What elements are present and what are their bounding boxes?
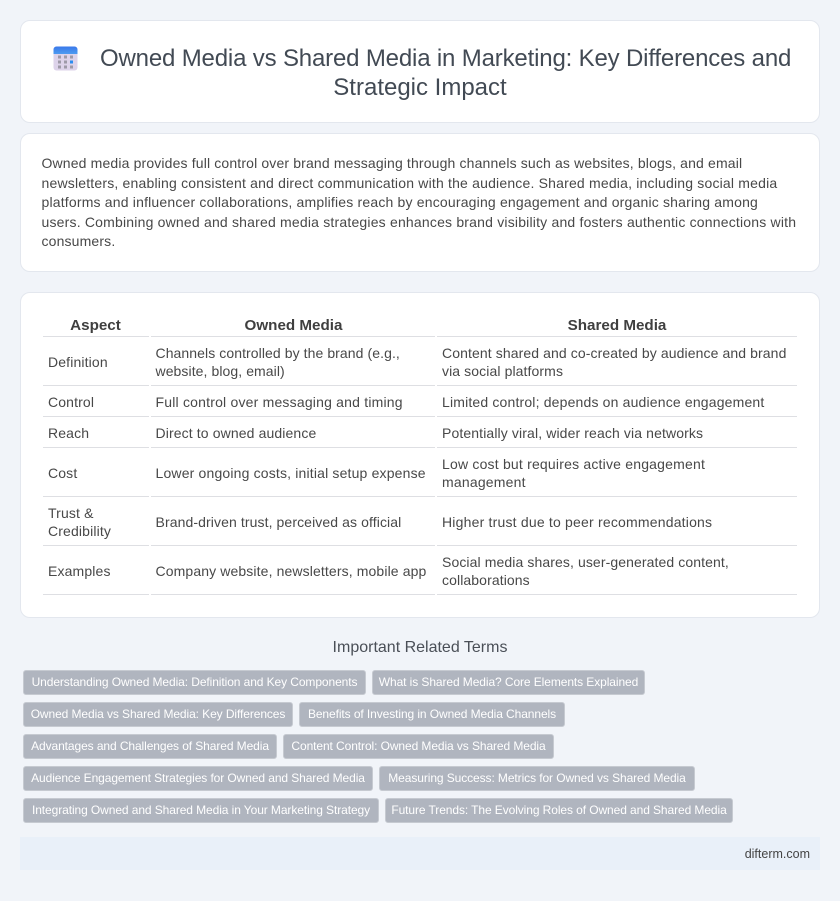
panel: intro text: newsletters, enabling consistent and direct communication with the audience. Shared media, including social media bbox=[42, 175, 777, 191]
row: trust bbox=[48, 505, 111, 539]
panel: comparison table: Company website, newsletters, mobile app bbox=[156, 563, 426, 579]
tags: related terms bbox=[23, 670, 733, 823]
tags: related terms: Owned Media vs Shared Media: Key Differences bbox=[31, 707, 285, 721]
panel: comparison table: Content shared and co-created by audience and brand bbox=[442, 345, 786, 361]
footer bbox=[20, 837, 820, 870]
tags: related terms: What is Shared Media? Core Elements Explained bbox=[379, 675, 638, 689]
panel: intro text bbox=[20, 133, 820, 272]
panel: comparison table: website, blog, email) bbox=[156, 363, 285, 379]
tags: related terms: Measuring Success: Metrics for Owned vs Shared Media bbox=[388, 771, 686, 785]
panel: comparison table bbox=[20, 292, 820, 618]
panel: comparison table: Potentially viral, wider reach via networks bbox=[442, 425, 703, 441]
panel: comparison table: Higher trust due to peer recommendations bbox=[442, 514, 712, 530]
icon: calendar bbox=[54, 46, 78, 70]
panel: comparison table: Direct to owned audience bbox=[156, 425, 316, 441]
row: trust: Credibility bbox=[48, 523, 111, 539]
panel: comparison table: Owned Media bbox=[245, 317, 342, 334]
row: definition: Definition bbox=[48, 354, 108, 370]
row: control: Control bbox=[48, 394, 94, 410]
tags: related terms: Benefits of Investing in Owned Media Channels bbox=[308, 707, 556, 721]
title: Owned Media vs Shared Media in Marketing: Key Differences and bbox=[100, 45, 791, 72]
tags: related terms: Understanding Owned Media: Definition and Key Components bbox=[32, 675, 357, 689]
footer source: difterm.com bbox=[745, 847, 810, 861]
panel: comparison table: management bbox=[442, 474, 526, 490]
panel: comparison table: Limited control; depends on audience engagement bbox=[442, 394, 764, 410]
panel: intro text: users. Combining owned and shared media strategies enhances brand visibility and fosters authentic connections with bbox=[42, 214, 796, 230]
row: examples: Examples bbox=[48, 563, 111, 579]
panel: intro text: consumers. bbox=[42, 233, 115, 249]
row: trust: Trust & bbox=[48, 505, 94, 521]
table headers: Aspect bbox=[70, 317, 121, 334]
panel: comparison table: Full control over messaging and timing bbox=[156, 394, 403, 410]
panel: comparison table: Low cost but requires active engagement bbox=[442, 456, 705, 472]
header card bbox=[20, 20, 820, 123]
row: cost: Cost bbox=[48, 465, 77, 481]
tags: related terms: Future Trends: The Evolving Roles of Owned and Shared Media bbox=[391, 803, 727, 817]
tags: related terms: Content Control: Owned Media vs Shared Media bbox=[291, 739, 546, 753]
panel: intro text: platforms and influencer collaborations, amplifies reach by encouraging engagement and organic sharing among bbox=[42, 194, 758, 210]
row: reach: Reach bbox=[48, 425, 89, 441]
tags: related terms: Integrating Owned and Shared Media in Your Marketing Strategy bbox=[32, 803, 370, 817]
heading: related terms: Important Related Terms bbox=[333, 639, 507, 656]
panel: comparison table: Lower ongoing costs, initial setup expense bbox=[156, 465, 426, 481]
tags: related terms: Advantages and Challenges of Shared Media bbox=[31, 739, 269, 753]
tags: related terms: Audience Engagement Strategies for Owned and Shared Media bbox=[31, 771, 365, 785]
panel: comparison table: Social media shares, user-generated content, bbox=[442, 554, 729, 570]
panel: comparison table: Channels controlled by the brand (e.g., bbox=[156, 345, 400, 361]
panel: comparison table: collaborations bbox=[442, 572, 530, 588]
panel: intro text: Owned media provides full control over brand messaging through channels such as websites, blogs, and email bbox=[42, 155, 742, 171]
panel: comparison table: Brand-driven trust, perceived as official bbox=[156, 514, 401, 530]
panel: comparison table: Shared Media bbox=[568, 317, 666, 334]
title line 2: Strategic Impact bbox=[333, 74, 507, 101]
panel: comparison table: via social platforms bbox=[442, 363, 563, 379]
